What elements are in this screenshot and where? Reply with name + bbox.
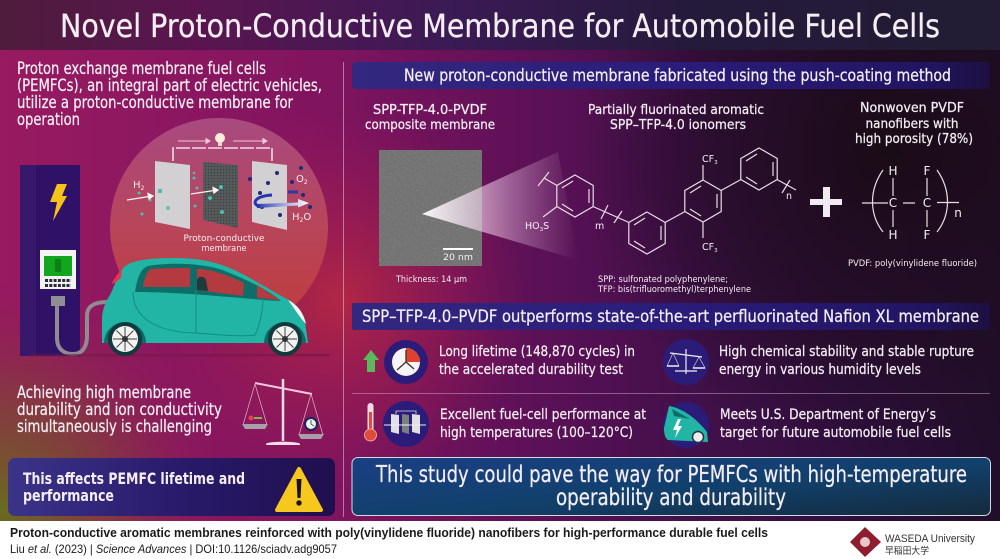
chemical structure: SPP-TFP ionomer: CF <box>702 154 714 165</box>
section heading: performance <box>352 303 990 330</box>
row divider <box>352 393 990 394</box>
protons and molecules <box>138 172 224 216</box>
front wheel <box>268 322 302 356</box>
benefit: chemical stability <box>663 339 974 385</box>
challenge text: Achieving high membrane <box>17 383 191 402</box>
gas labels <box>133 174 311 224</box>
nanofiber label: nanofibers with <box>866 116 958 132</box>
chemical structure: SPP-TFP ionomer: n <box>786 191 792 202</box>
gas labels: H <box>133 180 141 191</box>
car <box>30 258 330 356</box>
thickness label: Thickness: 14 µm <box>395 275 467 285</box>
challenge text: durability and ion conductivity <box>17 400 222 419</box>
footer band <box>0 521 1000 559</box>
fuel cell diagram circle <box>110 118 328 336</box>
car body <box>102 258 308 343</box>
abbreviations note: TFP: bis(trifluoromethyl)terphenylene <box>597 285 751 295</box>
car shadow <box>30 354 330 356</box>
water output arrow <box>255 192 309 208</box>
icon: lightning bolt <box>50 184 67 221</box>
chemical structure: SPP-TFP ionomer: HO <box>525 221 540 232</box>
ionomer label <box>588 102 764 133</box>
chemical structure: SPP-TFP ionomer <box>525 148 796 254</box>
ionomer label: Partially fluorinated aromatic <box>588 102 764 118</box>
chemical structure: PVDF: F <box>924 164 931 178</box>
benefit: meets DOE target: Meets U.S. Department of Energy’s <box>720 407 936 423</box>
abbreviations note <box>597 275 751 295</box>
intro text: Proton exchange membrane fuel cells <box>17 59 266 78</box>
nanofiber label <box>855 100 973 147</box>
intro text: utilize a proton-conductive membrane for <box>17 93 293 112</box>
challenge text: simultaneously is challenging <box>17 417 212 436</box>
composite membrane label: composite membrane <box>365 117 495 133</box>
nanofiber label: high porosity (78%) <box>855 131 973 147</box>
chemical structure: PVDF: H <box>888 164 898 178</box>
membrane micrograph: 20 nm <box>443 253 473 263</box>
fuel cell diagram <box>127 133 312 254</box>
anode plate <box>155 161 190 229</box>
icon: clock <box>384 340 428 384</box>
chemical structure: SPP-TFP ionomer: 3 <box>714 248 718 254</box>
cathode plate <box>252 161 287 230</box>
proton-conductive membrane <box>203 162 238 228</box>
car windows <box>143 268 280 300</box>
chemical structure: PVDF: C <box>889 196 897 210</box>
gas labels: 2 <box>300 217 304 224</box>
icon: electric car <box>663 402 709 448</box>
citation title: Proton-conductive aromatic membranes reinforced with poly(vinylidene fluoride) nanofibers for high-performance durable fuel cells <box>10 526 768 540</box>
external circuit wire <box>173 148 272 161</box>
chemical structure: SPP-TFP ionomer: 3 <box>540 227 544 233</box>
PVDF note: PVDF: poly(vinylidene fluoride) <box>848 259 977 269</box>
rear wheel <box>108 322 142 356</box>
membrane label <box>184 234 265 254</box>
challenge text <box>17 383 222 436</box>
wheel arches <box>104 322 306 343</box>
citation details: Liu et al. (2023) | Science Advances | DOI:10.1126/sciadv.adg9057 <box>10 542 337 556</box>
composite membrane label <box>365 102 495 133</box>
icon: balance scale <box>242 379 324 445</box>
section divider <box>343 62 344 517</box>
benefit: long lifetime: Long lifetime (148,870 cycles) in <box>439 344 635 360</box>
chemical structure: SPP-TFP ionomer: 3 <box>714 160 718 166</box>
intro text <box>17 59 322 129</box>
icon: scale <box>663 339 709 385</box>
chemical structure: PVDF: C <box>923 196 931 210</box>
gas labels: 2 <box>141 185 145 192</box>
membrane label: Proton-conductive <box>184 234 265 244</box>
gas labels: H <box>292 212 300 223</box>
flow arrows <box>127 188 218 200</box>
icon: warning triangle <box>277 469 321 510</box>
panel: conclusion <box>352 458 990 516</box>
charging plug <box>51 296 65 306</box>
headlight <box>288 300 306 324</box>
benefit: high temperature: Excellent fuel-cell performance at <box>440 407 646 423</box>
benefit: high temperature: high temperatures (100–120°C) <box>440 425 633 441</box>
charging cable <box>57 302 108 354</box>
chemical structure: PVDF: H <box>888 228 898 242</box>
membrane micrograph <box>379 150 482 266</box>
membrane label: membrane <box>202 244 247 254</box>
benefit: chemical stability: energy in various humidity levels <box>719 362 921 378</box>
driver silhouette <box>197 277 208 291</box>
chemical structure: SPP-TFP ionomer: CF <box>702 242 714 253</box>
panel: lifetime warning: This affects PEMFC lifetime and <box>23 469 245 488</box>
chemical structure: PVDF: n <box>954 206 962 220</box>
intro text: (PEMFCs), an integral part of electric vehicles, <box>17 76 322 95</box>
charging station <box>20 165 108 356</box>
chemical structure: SPP-TFP ionomer: S <box>543 221 549 232</box>
window frame <box>135 264 281 301</box>
door seams <box>133 290 263 336</box>
light bulb <box>215 133 225 146</box>
chemical structure: PVDF <box>862 164 962 242</box>
intro text: operation <box>17 110 80 129</box>
charger screen <box>40 250 76 289</box>
gas labels: O <box>296 174 304 185</box>
panel: conclusion: operability and durability <box>556 485 786 511</box>
icon: green up arrow <box>363 350 379 372</box>
ionomer label: SPP–TFP-4.0 ionomers <box>610 117 746 133</box>
benefit: meets DOE target <box>663 402 951 448</box>
gas labels: 2 <box>304 179 308 186</box>
composite membrane label: SPP-TFP-4.0-PVDF <box>373 102 487 118</box>
gas labels: O <box>303 212 311 223</box>
benefit: high temperature <box>364 401 646 447</box>
rear light <box>112 268 122 284</box>
benefit: long lifetime: the accelerated durability test <box>439 362 623 378</box>
chemical structure: SPP-TFP ionomer: m <box>595 221 604 232</box>
chemical structure: PVDF: F <box>924 228 931 242</box>
current arrows <box>178 138 267 144</box>
benefit: meets DOE target: target for future automobile fuel cells <box>720 425 951 441</box>
Waseda University logo <box>850 527 975 557</box>
icon: fuel cell <box>383 401 429 447</box>
header band <box>0 0 1000 50</box>
Waseda University logo: WASEDA University <box>885 533 975 545</box>
plus sign <box>810 187 842 217</box>
benefit: long lifetime <box>363 340 635 384</box>
Waseda University logo: 早稲田大学 <box>885 545 929 557</box>
panel: lifetime warning: performance <box>23 486 114 505</box>
abbreviations note: SPP: sulfonated polyphenylene; <box>598 275 728 285</box>
icon: thermometer <box>364 403 376 441</box>
nanofiber label: Nonwoven PVDF <box>860 100 964 116</box>
panel: lifetime warning <box>8 458 335 516</box>
section heading: fabrication <box>352 62 990 89</box>
magnification cone <box>422 152 578 260</box>
